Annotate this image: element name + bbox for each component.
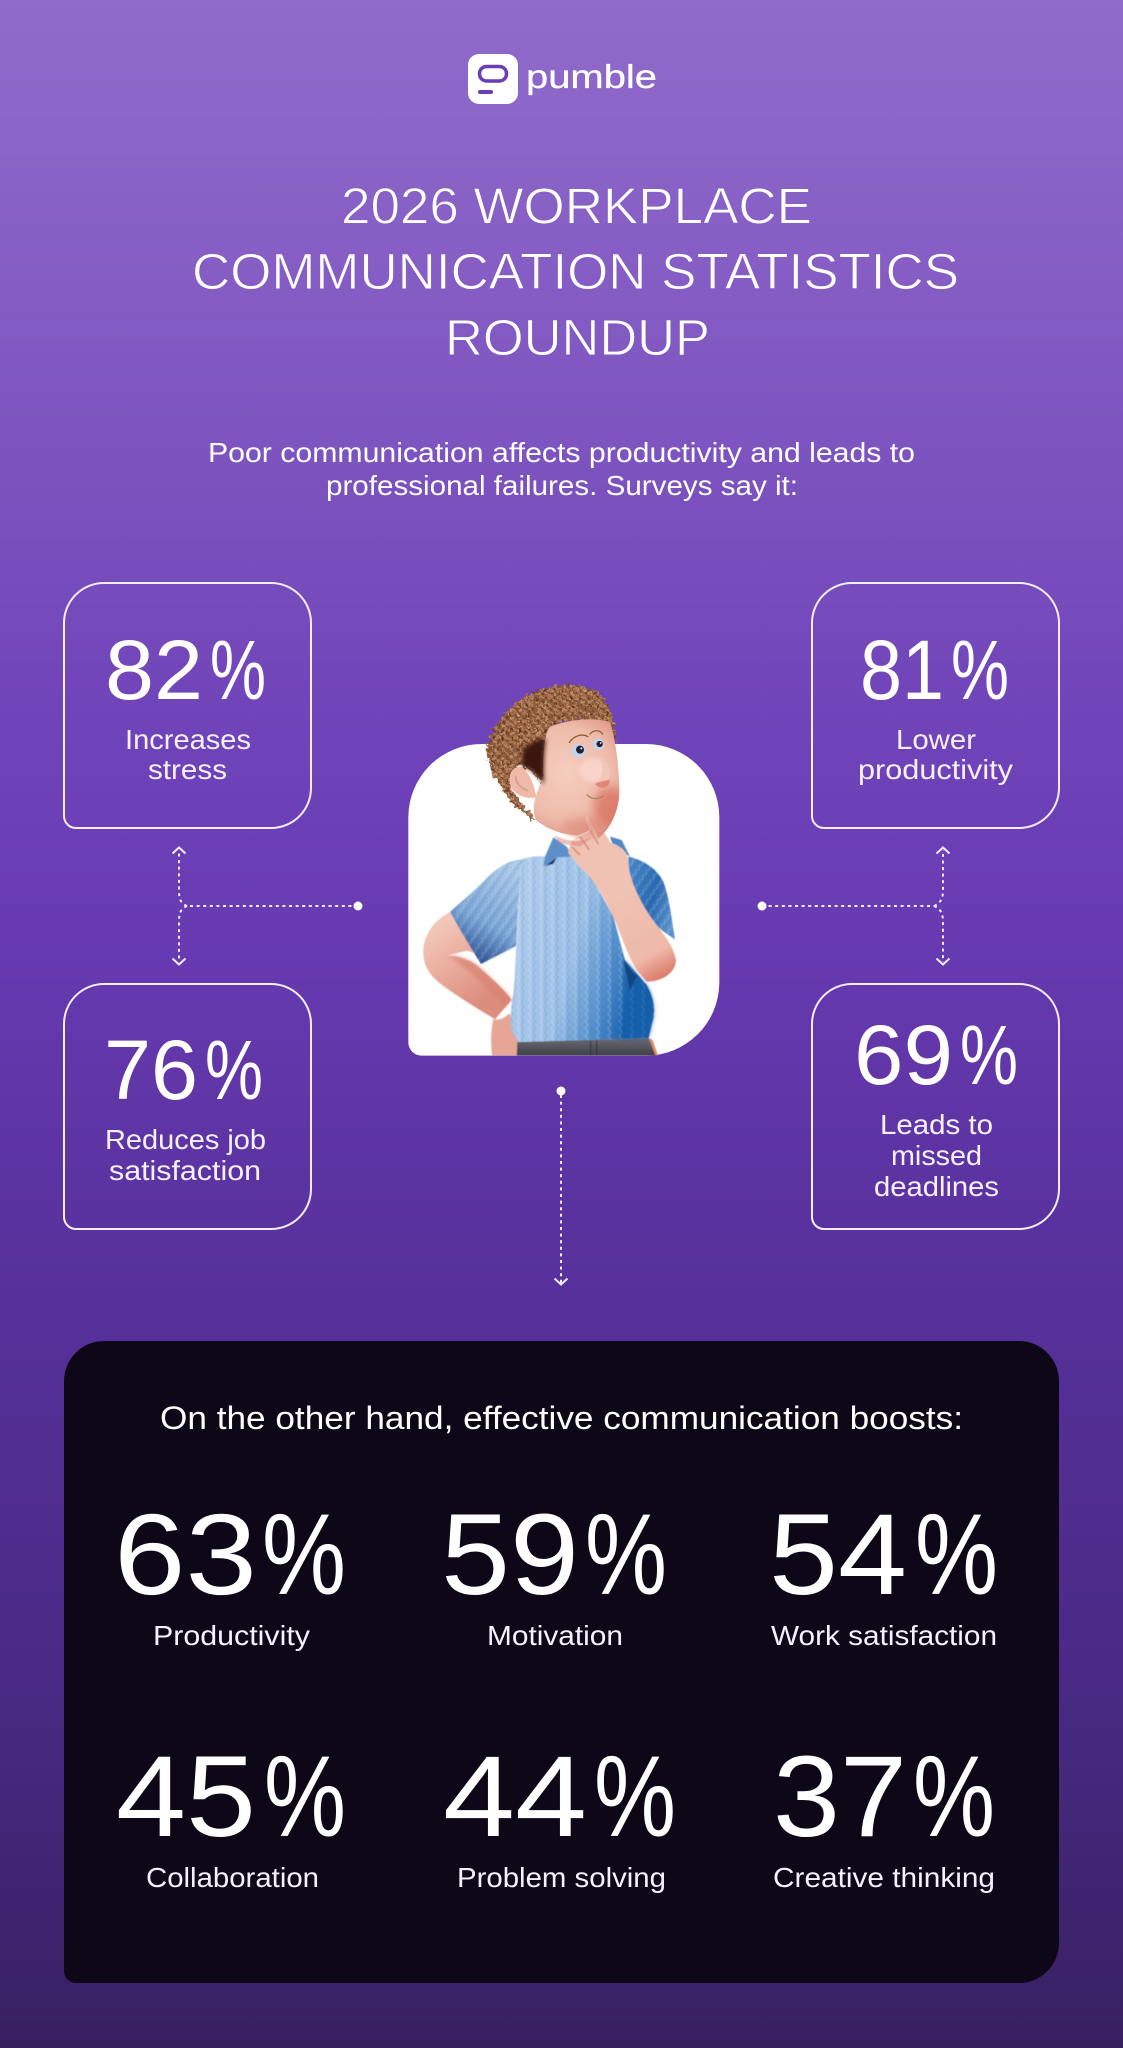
left eye xyxy=(571,744,586,757)
ear xyxy=(510,767,537,798)
icon: thinking man illustration xyxy=(408,685,719,1056)
face xyxy=(534,719,619,838)
hand on hip xyxy=(491,1013,518,1056)
stat: 45% collaboration xyxy=(116,1733,346,1893)
intro text: professional failures. Surveys say it: xyxy=(326,470,798,501)
panel: stat 76% reduces job satisfaction: Reduces job xyxy=(105,1124,266,1155)
stat: 37% creative thinking: 37 xyxy=(773,1733,907,1861)
panel: stat 76% reduces job satisfaction: 76 xyxy=(104,1023,198,1117)
stat: 37% creative thinking: % xyxy=(913,1733,995,1861)
nose xyxy=(579,758,610,788)
panel: stat 82% increases stress: Increases xyxy=(125,724,251,755)
white rounded backdrop xyxy=(408,744,719,1056)
left sleeve xyxy=(450,859,522,964)
panel: stat 76% reduces job satisfaction: satisfaction xyxy=(109,1155,261,1186)
stat: 59% motivation: 59 xyxy=(441,1491,579,1619)
panel: stat 81% lower productivity: 81 xyxy=(860,623,944,717)
figure xyxy=(423,685,676,1056)
icon: pumble chat bubble xyxy=(468,54,518,104)
collar xyxy=(543,837,572,866)
title: COMMUNICATION STATISTICS xyxy=(192,243,959,300)
neck shadow xyxy=(553,835,593,847)
stat: 44% problem solving: 44 xyxy=(443,1733,587,1861)
stat: 63% productivity: % xyxy=(262,1491,346,1619)
panel: stat 69% leads to missed deadlines: 69 xyxy=(854,1008,953,1102)
panel: effective communication boosts xyxy=(64,1341,1059,1983)
stat: 44% problem solving xyxy=(443,1733,676,1893)
panel: stat 69% leads to missed deadlines: missed xyxy=(891,1140,982,1171)
logo wordmark: pumble xyxy=(526,58,657,95)
mouth xyxy=(587,794,603,799)
stat: 63% productivity: 63 xyxy=(114,1491,257,1619)
title: ROUNDUP xyxy=(445,309,710,366)
finger lines xyxy=(572,830,598,855)
title: 2026 WORKPLACE xyxy=(341,178,812,234)
dark hair behind ear xyxy=(522,739,546,784)
panel: stat 69% leads to missed deadlines: Leads to xyxy=(880,1109,993,1140)
panel: stat 81% lower productivity: Lower xyxy=(896,724,976,755)
right sleeve xyxy=(628,857,675,939)
panel: stat 82% increases stress: stress xyxy=(148,754,227,785)
panel: stat 82% increases stress: 82 xyxy=(105,623,203,717)
arrow: right forked connector xyxy=(758,848,950,964)
stat: 45% collaboration: % xyxy=(264,1733,346,1861)
panel heading: On the other hand, effective communication boosts: xyxy=(160,1400,963,1436)
eyebrows xyxy=(569,731,603,742)
right eye xyxy=(593,739,604,750)
panel: stat 82% increases stress xyxy=(64,583,311,828)
arrow: connector down to dark panel xyxy=(554,1086,568,1284)
stat: 44% problem solving: Problem solving xyxy=(457,1862,666,1893)
panel: stat 82% increases stress: % xyxy=(210,623,266,717)
panel: stat 81% lower productivity: % xyxy=(951,623,1009,717)
trousers xyxy=(517,1038,657,1056)
panel: stat 69% leads to missed deadlines: deadlines xyxy=(874,1171,999,1202)
stat: 59% motivation xyxy=(441,1491,667,1651)
hair xyxy=(486,685,616,822)
intro text: Poor communication affects productivity and leads to xyxy=(208,437,915,468)
stat: 59% motivation: Motivation xyxy=(487,1620,623,1651)
arrow: left forked connector xyxy=(172,848,362,964)
intro text xyxy=(208,437,915,501)
stat: 37% creative thinking xyxy=(773,1733,995,1893)
stat: 59% motivation: % xyxy=(585,1491,667,1619)
stat: 54% work satisfaction: % xyxy=(915,1491,998,1619)
stat: 54% work satisfaction: Work satisfaction xyxy=(771,1620,997,1651)
panel: stat 81% lower productivity xyxy=(812,583,1059,828)
panel: stat 69% leads to missed deadlines xyxy=(812,984,1059,1229)
panel: stat 81% lower productivity: productivity xyxy=(858,754,1013,785)
stat: 63% productivity xyxy=(114,1491,346,1651)
stat: 45% collaboration: Collaboration xyxy=(146,1862,319,1893)
title xyxy=(192,178,959,366)
logo: pumble xyxy=(468,54,657,104)
stat: 54% work satisfaction xyxy=(769,1491,998,1651)
stat: 45% collaboration: 45 xyxy=(116,1733,256,1861)
stat: 54% work satisfaction: 54 xyxy=(769,1491,907,1619)
face shading xyxy=(563,787,627,836)
stat: 37% creative thinking: Creative thinking xyxy=(773,1862,995,1893)
left arm xyxy=(423,912,512,1019)
forearm and hand xyxy=(568,813,676,982)
torso xyxy=(511,856,654,1042)
panel: stat 76% reduces job satisfaction: % xyxy=(205,1023,263,1117)
panel: stat 76% reduces job satisfaction xyxy=(64,984,311,1229)
panel: stat 69% leads to missed deadlines: % xyxy=(960,1008,1018,1102)
stat: 44% problem solving: % xyxy=(594,1733,676,1861)
stat: 63% productivity: Productivity xyxy=(153,1620,310,1651)
